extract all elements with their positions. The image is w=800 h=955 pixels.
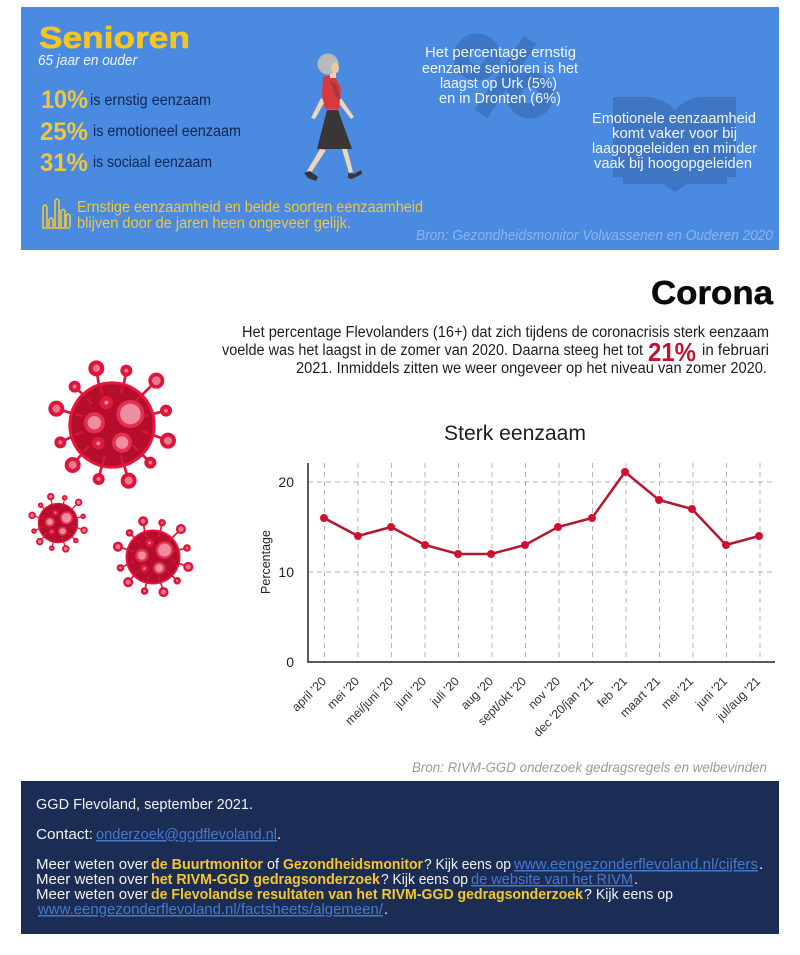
- icon: percent sign: [461, 40, 546, 114]
- text: lowest percentage: [422, 44, 579, 107]
- x axis labels: mei '21: [658, 674, 696, 712]
- x axis labels: sept/okt '20: [475, 674, 529, 728]
- source: corona: Bron: RIVM-GGD onderzoek gedragsregels en welbevinden: [412, 759, 767, 775]
- text: trend note: blijven door de jaren heen ongeveer gelijk.: [77, 215, 351, 232]
- source: senioren: Bron: Gezondheidsmonitor Volwassenen en Ouderen 2020: [416, 228, 773, 244]
- footer contact: .: [277, 826, 281, 843]
- x axis labels: juni '20: [391, 674, 429, 712]
- data line: [320, 468, 763, 558]
- icon: walking senior woman: [304, 54, 362, 181]
- statistic: 10 percent: 10%: [41, 86, 88, 114]
- text: education note: Emotionele eenzaamheid: [592, 110, 756, 127]
- text: education note: vaak bij hoogopgeleiden: [594, 155, 752, 172]
- y axis labels: 10: [278, 564, 294, 580]
- footer links: .: [634, 871, 638, 888]
- text: trend note: [77, 199, 423, 232]
- text: education note: komt vaker voor bij: [612, 125, 737, 142]
- text: lowest percentage: Het percentage ernstig: [425, 44, 576, 61]
- y axis labels: 0: [286, 654, 294, 670]
- text: corona intro: [222, 324, 769, 377]
- statistic: 31 percent: is sociaal eenzaam: [93, 154, 212, 171]
- x axis labels: nov '20: [525, 674, 563, 712]
- y axis title: Percentage: [259, 530, 273, 594]
- statistic: 25 percent: is emotioneel eenzaam: [93, 123, 241, 140]
- chart: sterk eenzaam: [259, 422, 775, 740]
- statistic: 10 percent: [41, 86, 211, 114]
- y axis labels: [278, 474, 294, 670]
- footer links: de Buurtmonitor: [151, 856, 263, 873]
- text: education note: laagopgeleiden en minder: [592, 140, 757, 157]
- footer links: de website van het RIVM: [471, 871, 633, 888]
- icon: large virus: [48, 360, 176, 489]
- footer links: www.eengezonderflevoland.nl/cijfers: [513, 856, 758, 873]
- statistic: 31 percent: [40, 149, 212, 177]
- x axis labels: mei/juni '20: [343, 674, 396, 728]
- heading: senioren: Senioren: [39, 20, 190, 55]
- footer links: Gezondheidsmonitor: [283, 856, 423, 873]
- footer links: ? Kijk eens op: [381, 871, 468, 888]
- text: education note: [592, 110, 757, 172]
- text: corona intro: voelde was het laagst in de zomer van 2020. Daarna steeg het tot: [222, 342, 644, 359]
- footer links: ? Kijk eens op: [424, 856, 511, 873]
- x axis labels: juni '21: [692, 674, 730, 712]
- heading: corona: Corona: [651, 274, 774, 311]
- text: lowest percentage: laagst op Urk (5%): [440, 75, 557, 92]
- statistic: 10 percent: is ernstig eenzaam: [90, 92, 211, 109]
- footer links: .: [759, 856, 763, 873]
- statistic: 25 percent: 25%: [40, 118, 88, 146]
- x axis labels: jul/aug '21: [713, 674, 763, 724]
- icon: small virus: [28, 493, 88, 553]
- icon: open book: [613, 97, 736, 192]
- footer links: Meer weten over: [36, 871, 148, 888]
- footer links: .: [384, 901, 388, 918]
- x axis labels: maart '21: [617, 674, 663, 720]
- chart title: Sterk eenzaam: [444, 422, 586, 445]
- text: lowest percentage: eenzame senioren is het: [422, 60, 579, 77]
- text: corona intro: 2021. Inmiddels zitten we weer ongeveer op het niveau van zomer 2020.: [296, 360, 767, 377]
- footer links: Meer weten over: [36, 886, 148, 903]
- x axis labels: feb '21: [594, 674, 630, 710]
- panel: footer: [21, 781, 779, 934]
- x axis labels: april '20: [289, 674, 329, 714]
- subheading: age: 65 jaar en ouder: [38, 52, 138, 69]
- footer links: [36, 856, 763, 918]
- footer links: of: [267, 856, 280, 873]
- footer links: het RIVM-GGD gedragsonderzoek: [151, 871, 381, 888]
- icon: medium virus: [113, 516, 193, 597]
- callout: 21 percent: 21%: [648, 337, 696, 367]
- footer links: Meer weten over: [36, 856, 148, 873]
- text: corona intro: in februari: [702, 342, 769, 359]
- text: trend note: Ernstige eenzaamheid en beide soorten eenzaamheid: [77, 199, 423, 216]
- footer date: GGD Flevoland, september 2021.: [36, 796, 253, 813]
- x axis labels: dec '20/jan '21: [531, 674, 596, 740]
- statistic: 31 percent: 31%: [40, 149, 88, 177]
- x axis labels: aug '20: [458, 674, 496, 712]
- footer contact: Contact:: [36, 826, 93, 843]
- panel: senioren: [21, 7, 779, 250]
- x axis labels: [289, 674, 763, 740]
- text: lowest percentage: en in Dronten (6%): [439, 90, 561, 107]
- x axis labels: juli '20: [427, 674, 462, 709]
- statistic: 25 percent: [40, 118, 241, 146]
- text: corona intro: Het percentage Flevolanders (16+) dat zich tijdens de coronacrisis sterk eenzaam: [242, 324, 769, 341]
- footer links: www.eengezonderflevoland.nl/factsheets/algemeen/: [37, 901, 384, 918]
- y axis labels: 20: [278, 474, 294, 490]
- footer contact: onderzoek@ggdflevoland.nl: [96, 826, 277, 843]
- footer links: de Flevolandse resultaten van het RIVM-GGD gedragsonderzoek: [151, 886, 584, 903]
- x axis labels: mei '20: [324, 674, 362, 712]
- icon: bar chart: [42, 199, 70, 228]
- footer links: ? Kijk eens op: [584, 886, 673, 903]
